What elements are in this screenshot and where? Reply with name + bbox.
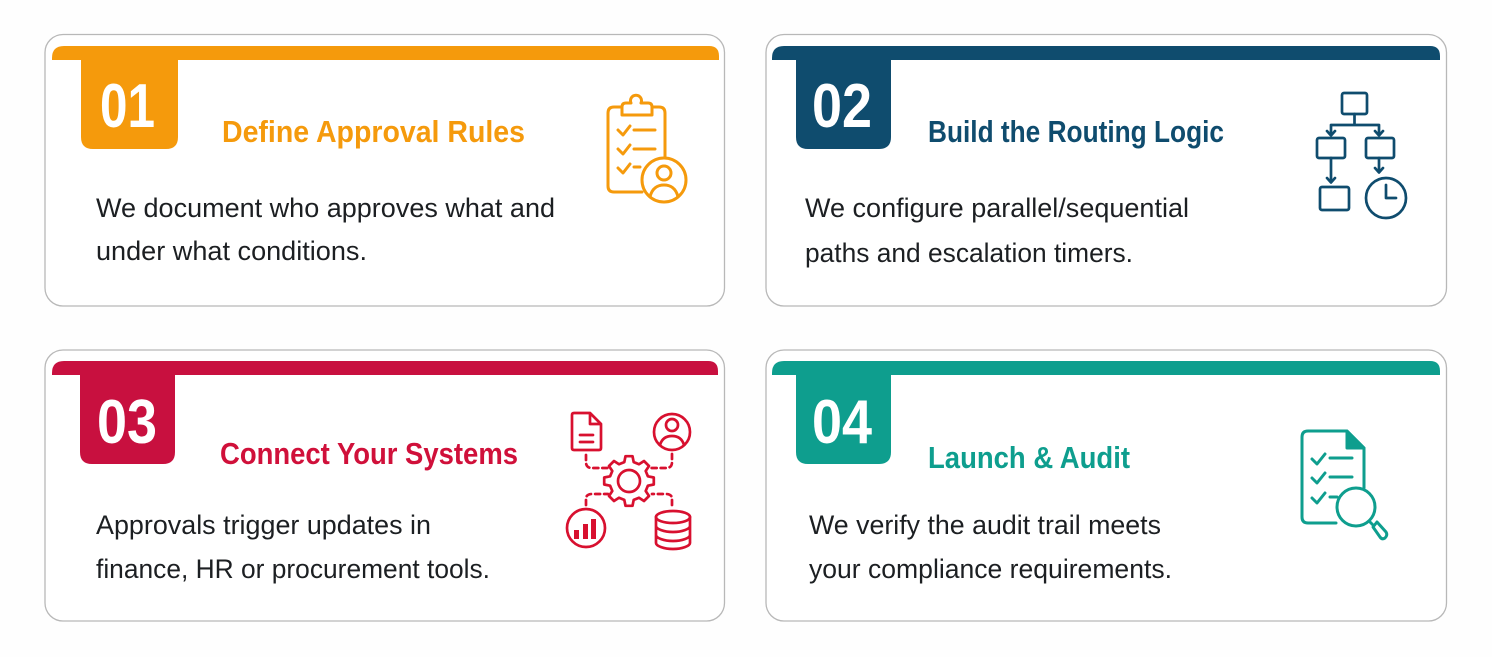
number tab 01 — [52, 46, 719, 149]
panel: step 02 build the routing logic — [766, 34, 1446, 306]
body text: We document who approves what and — [96, 193, 555, 223]
number tab 02: 02 — [812, 72, 872, 141]
icon: clipboard with checklist and person — [608, 95, 686, 202]
body text: paths and escalation timers. — [805, 238, 1133, 268]
heading: Connect Your Systems — [220, 436, 518, 471]
number tab 04: 04 — [812, 388, 872, 457]
number tab 01: 01 — [100, 72, 155, 141]
body text: Approvals trigger updates in — [96, 510, 431, 540]
icon: gear connected to document, user, chart and database — [567, 413, 690, 549]
panel: step 03 connect your systems — [45, 350, 724, 621]
body text: We configure parallel/sequential — [805, 193, 1189, 223]
body text: finance, HR or procurement tools. — [96, 554, 490, 584]
heading: Define Approval Rules — [222, 114, 525, 149]
body text — [96, 510, 490, 584]
heading: Build the Routing Logic — [928, 114, 1224, 149]
panel: step 01 define approval rules — [45, 34, 724, 306]
panel: step 04 launch and audit — [766, 350, 1446, 621]
icon: flowchart with clock — [1317, 93, 1406, 218]
body text: your compliance requirements. — [809, 554, 1172, 584]
body text — [809, 510, 1172, 584]
body text — [805, 193, 1189, 268]
number tab 03 — [52, 361, 718, 464]
number tab 03: 03 — [97, 388, 157, 457]
body text — [96, 193, 555, 266]
icon: checklist document with magnifier — [1302, 431, 1387, 539]
number tab 04 — [772, 361, 1440, 464]
heading: Launch & Audit — [928, 440, 1130, 475]
body text: We verify the audit trail meets — [809, 510, 1161, 540]
body text: under what conditions. — [96, 236, 367, 266]
number tab 02 — [772, 46, 1440, 149]
